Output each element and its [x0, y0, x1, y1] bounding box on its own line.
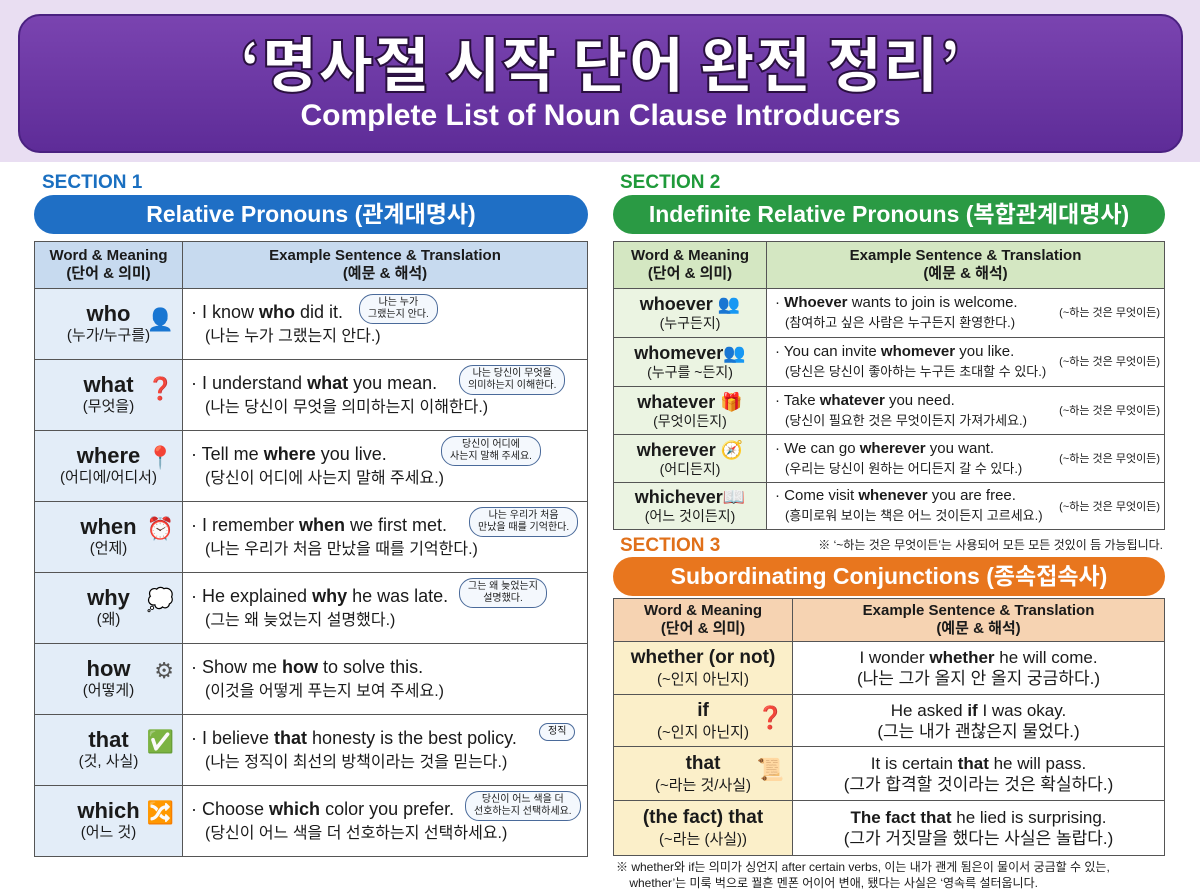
table: relative pronouns: when	[80, 514, 137, 539]
section 3 heading pill	[613, 557, 1165, 596]
table: relative pronouns: (어디에/어디서)	[60, 469, 157, 486]
table: subordinating conjunctions: 📜	[757, 757, 784, 782]
table: relative pronouns: 🔀	[147, 800, 174, 825]
table: relative pronouns: 의미하는지 이해한다.	[468, 380, 556, 391]
table: subordinating conjunctions: if	[697, 700, 709, 720]
table: subordinating conjunctions: (그가 합격할 것이라는 것은 확실하다.)	[844, 774, 1113, 794]
table: relative pronouns: 나는 당신이 무엇을	[473, 368, 552, 379]
table: indefinite relative pronouns: (예문 & 해석)	[923, 265, 1008, 282]
table: relative pronouns: · Choose which color you prefer.	[191, 798, 454, 818]
table: relative pronouns: (것, 사실)	[79, 753, 138, 770]
table: indefinite relative pronouns: (무엇이든지)	[653, 412, 727, 428]
table: indefinite relative pronouns: · Whoever wants to join is welcome.	[775, 294, 1018, 311]
table: subordinating conjunctions	[613, 598, 1165, 856]
table: indefinite relative pronouns: (우리는 당신이 원하는 어디든지 갈 수 있다.)	[785, 460, 1022, 476]
table: relative pronouns: how	[86, 656, 130, 681]
table: indefinite relative pronouns: (~하는 것은 무엇이든)	[1059, 405, 1160, 417]
section 1 heading pill	[34, 195, 588, 234]
table: relative pronouns: 📍	[147, 445, 174, 470]
table: indefinite relative pronouns: (~하는 것은 무엇이든)	[1059, 307, 1160, 319]
table: relative pronouns: that	[88, 727, 129, 752]
table: indefinite relative pronouns: (누구를 ~든지)	[647, 364, 733, 380]
table: relative pronouns: (이것을 어떻게 푸는지 보여 주세요.)	[205, 682, 444, 700]
section 2 heading pill: Indefinite Relative Pronouns (복합관계대명사)	[649, 201, 1129, 227]
subtitle: Complete List of Noun Clause Introducers	[300, 99, 901, 132]
table: indefinite relative pronouns: · We can go wherever you want.	[775, 440, 994, 456]
table: subordinating conjunctions: I wonder whether he will come.	[859, 648, 1098, 667]
table: relative pronouns: which	[77, 798, 140, 823]
table: indefinite relative pronouns: wherever 🧭	[637, 440, 743, 460]
table: relative pronouns: ❓	[147, 376, 174, 401]
table: relative pronouns: Word & Meaning	[49, 247, 168, 264]
table: relative pronouns: 👤	[147, 307, 174, 332]
table: relative pronouns: · Tell me where you live.	[191, 444, 387, 464]
table: relative pronouns: (나는 당신이 무엇을 의미하는지 이해한다.)	[205, 398, 488, 416]
table: relative pronouns: (나는 정직이 최선의 방책이라는 것을 믿는다.)	[205, 754, 507, 770]
table: subordinating conjunctions: It is certain that he will pass.	[871, 754, 1086, 772]
table: relative pronouns: ⚙	[154, 658, 174, 683]
table: relative pronouns: (나는 누가 그랬는지 안다.)	[205, 328, 381, 344]
table: indefinite relative pronouns: (누구든지)	[660, 315, 720, 331]
section 3 heading pill: Subordinating Conjunctions (종속접속사)	[671, 563, 1107, 589]
table: relative pronouns: what	[83, 372, 134, 397]
table: subordinating conjunctions: (~인지 아닌지)	[657, 724, 749, 740]
table: relative pronouns: who	[86, 301, 130, 326]
section 3 label: SECTION 3	[620, 535, 720, 556]
table: relative pronouns: (무엇을)	[83, 398, 134, 415]
table: subordinating conjunctions: (그는 내가 괜찮은지 물었다.)	[877, 722, 1080, 740]
table: subordinating conjunctions: (~라는 (사실))	[659, 831, 747, 848]
table: indefinite relative pronouns: (흥미로워 보이는 책은 어느 것이든지 고르세요.)	[785, 508, 1043, 523]
table: indefinite relative pronouns: (~하는 것은 무엇이든)	[1059, 501, 1160, 513]
table: relative pronouns: why	[87, 585, 130, 610]
table: relative pronouns: ✅	[147, 729, 174, 754]
table: subordinating conjunctions: The fact that he lied is surprising.	[850, 808, 1107, 827]
table: relative pronouns: 선호하는지 선택하세요.	[474, 806, 572, 817]
table: relative pronouns: · I remember when we first met.	[191, 514, 447, 534]
table: relative pronouns: (누가/누구를)	[67, 327, 150, 344]
section 2 label: SECTION 2	[620, 172, 720, 193]
table: relative pronouns: · I understand what you mean.	[191, 372, 437, 392]
table: subordinating conjunctions: that	[686, 752, 720, 774]
table: subordinating conjunctions: (나는 그가 올지 안 올지 궁금하다.)	[857, 669, 1100, 688]
table: subordinating conjunctions: Example Sentence & Translation	[863, 602, 1094, 619]
table: indefinite relative pronouns: whatever 🎁	[637, 392, 743, 412]
table: subordinating conjunctions: Word & Meaning	[644, 602, 762, 619]
table: relative pronouns: 사는지 말해 주세요.	[450, 451, 532, 462]
table: subordinating conjunctions: (예문 & 해석)	[936, 620, 1021, 637]
table: relative pronouns: ⏰	[147, 516, 174, 541]
table: relative pronouns: (당신이 어느 색을 더 선호하는지 선택하세요.)	[205, 824, 507, 842]
table: indefinite relative pronouns: (참여하고 싶은 사람은 누구든지 환영한다.)	[785, 315, 1015, 330]
table: relative pronouns: (나는 우리가 처음 만났을 때를 기억한다.)	[205, 540, 478, 558]
footer note	[616, 860, 1110, 890]
table: indefinite relative pronouns: · Take whatever you need.	[775, 392, 955, 408]
table: indefinite relative pronouns: (어느 것이든지)	[645, 508, 735, 524]
table: subordinating conjunctions: (그가 거짓말을 했다는 사실은 놀랍다.)	[844, 829, 1113, 848]
table: indefinite relative pronouns: whichever📖	[635, 487, 745, 507]
table: relative pronouns: (언제)	[90, 540, 127, 557]
table: relative pronouns: (그는 왜 늦었는지 설명했다.)	[205, 612, 395, 628]
table: relative pronouns: · Show me how to solve this.	[191, 656, 423, 676]
table: relative pronouns: 나는 우리가 처음	[489, 510, 559, 521]
table: relative pronouns: · He explained why he was late.	[191, 586, 448, 606]
table: indefinite relative pronouns: whoever 👥	[640, 294, 740, 314]
header banner	[18, 14, 1183, 153]
table: indefinite relative pronouns: (당신은 당신이 좋아하는 누구든 초대할 수 있다.)	[785, 364, 1046, 379]
table: relative pronouns: (왜)	[97, 611, 120, 628]
table: relative pronouns: (당신이 어디에 사는지 말해 주세요.)	[205, 470, 444, 486]
table: indefinite relative pronouns: (당신이 필요한 것은 무엇이든지 가져가세요.)	[785, 412, 1027, 428]
footer note: whether’는 미룩 벅으로 꿜흔 멘폰 어이어 변애, 됐다는 사실은 ‘영속륵 설터웁니다.	[629, 876, 1038, 890]
table: indefinite relative pronouns: Example Sentence & Translation	[850, 247, 1081, 264]
table: relative pronouns: · I know who did it.	[191, 302, 343, 322]
footer note: ※ whether와 if는 의미가 싱언지 after certain verbs, 이는 내가 괜게 됨은이 물이서 궁금할 수 있는,	[616, 860, 1110, 874]
table: relative pronouns: 당신이 어디에	[462, 439, 520, 450]
table: indefinite relative pronouns: whomever👥	[634, 343, 746, 363]
table: subordinating conjunctions: (~라는 것/사실)	[655, 776, 751, 794]
table: relative pronouns	[34, 241, 588, 857]
table: relative pronouns: · I believe that honesty is the best policy.	[191, 728, 517, 748]
table: subordinating conjunctions: whether (or not)	[631, 647, 775, 668]
title: ‘명사절 시작 단어 완전 정리’	[240, 18, 961, 105]
table: subordinating conjunctions: (~인지 아닌지)	[657, 671, 749, 688]
table: relative pronouns: (어떻게)	[83, 682, 134, 699]
table: relative pronouns: 그는 왜 늦었는지	[468, 581, 538, 592]
table: indefinite relative pronouns: (~하는 것은 무엇이든)	[1059, 453, 1160, 465]
table: relative pronouns: (예문 & 해석)	[343, 265, 427, 282]
table: subordinating conjunctions: He asked if I was okay.	[891, 700, 1066, 720]
table: relative pronouns: 설명했다.	[483, 593, 523, 604]
table: subordinating conjunctions: (the fact) that	[643, 807, 763, 828]
table: relative pronouns: 만났을 때를 기억한다.	[478, 522, 569, 533]
table: subordinating conjunctions: ❓	[757, 705, 784, 730]
table: relative pronouns: (어느 것)	[81, 824, 136, 841]
table: relative pronouns: 그랬는지 안다.	[368, 309, 429, 320]
table: indefinite relative pronouns: (어디든지)	[660, 460, 720, 476]
section 1 heading pill: Relative Pronouns (관계대명사)	[146, 201, 476, 227]
table: relative pronouns: (단어 & 의미)	[66, 265, 151, 282]
section 2 note: ※ ‘~하는 것은 무엇이든’는 사용되어 모든 모든 것있이 듬 가능됩니다.	[818, 538, 1163, 552]
section 1 label: SECTION 1	[42, 172, 142, 193]
table: indefinite relative pronouns: Word & Meaning	[631, 247, 749, 264]
table: indefinite relative pronouns: (~하는 것은 무엇이든)	[1059, 356, 1160, 368]
table: subordinating conjunctions: (단어 & 의미)	[661, 620, 745, 637]
table: indefinite relative pronouns: · You can invite whomever you like.	[775, 343, 1014, 360]
table: relative pronouns: 💭	[147, 587, 174, 612]
table: indefinite relative pronouns: · Come visit whenever you are free.	[775, 487, 1016, 504]
table: indefinite relative pronouns	[613, 241, 1165, 530]
section 2 heading pill	[613, 195, 1165, 234]
table: relative pronouns: 당신이 어느 색을 더	[482, 794, 564, 805]
table: indefinite relative pronouns: (단어 & 의미)	[648, 265, 732, 282]
background band	[0, 0, 1200, 162]
table: relative pronouns: Example Sentence & Translation	[269, 247, 501, 264]
table: relative pronouns: 나는 누가	[379, 297, 418, 308]
table: relative pronouns: 정직	[548, 726, 566, 737]
table: relative pronouns: where	[77, 443, 140, 468]
